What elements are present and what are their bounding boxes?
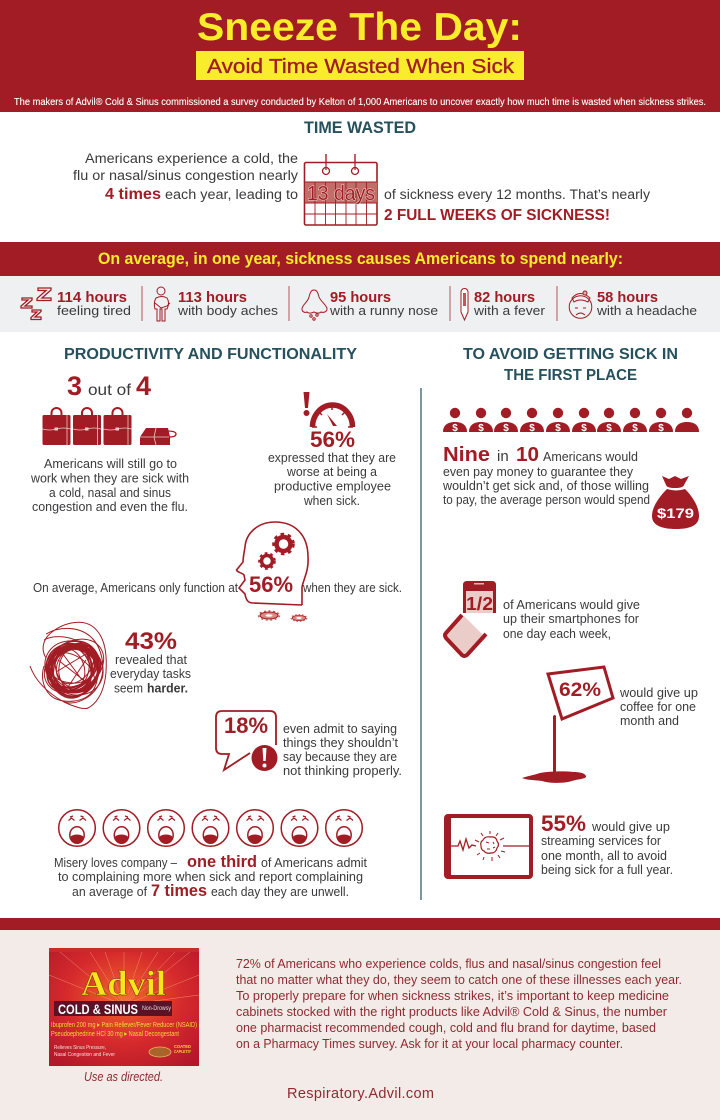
icon: tangled scribble — [30, 622, 114, 709]
stat: body aches: 113 hours — [178, 290, 247, 306]
subtitle banner: Avoid Time Wasted When Sick — [207, 56, 515, 78]
text block: colds per year — [73, 151, 299, 203]
text block: two full weeks: of sickness every 12 months. That’s nearly — [384, 187, 651, 203]
icons: row of ten people — [443, 408, 699, 434]
icon: runny nose — [302, 290, 327, 320]
text block: misery loves company: one third — [187, 852, 257, 871]
banner: on average — [0, 242, 720, 276]
subtitle banner — [196, 51, 524, 80]
product box: Advil Cold and Sinus — [49, 948, 199, 1066]
stat: headache: 58 hours — [597, 290, 658, 306]
stat: feeling tired: 114 hours — [57, 290, 127, 306]
heading: time wasted: TIME WASTED — [304, 119, 416, 137]
text block: things they shouldn't say: not thinking properly. — [283, 763, 402, 778]
footer body text: To properly prepare for when sickness strikes, it’s important to keep medicine — [236, 988, 669, 1003]
icon: money bag $179: $179 — [657, 506, 694, 521]
text block: things they shouldn't say: things they shouldn’t — [283, 735, 398, 750]
stat: 43% harder tasks — [110, 628, 191, 696]
text block: smartphones: up their smartphones for — [503, 611, 640, 626]
text block: coffee: would give up — [619, 685, 698, 700]
icon: head with gears — [236, 522, 308, 621]
stat: 56% worse employee: worse at being a — [286, 464, 378, 479]
icon: head with gears: 56% — [249, 572, 293, 597]
icon: half smartphone: 1/2 — [466, 594, 493, 614]
stat: 43% harder tasks: revealed that — [115, 652, 187, 667]
text block: streaming services: being sick for a full year. — [541, 862, 673, 877]
text block: nine in 10: Americans would — [543, 449, 638, 464]
text block: misery loves company: each day they are unwell. — [211, 884, 349, 899]
stat: body aches — [177, 290, 279, 318]
column divider — [420, 388, 422, 900]
text block: streaming services: streaming services for — [541, 833, 662, 848]
stat: headache — [596, 290, 697, 318]
stat: runny nose — [329, 290, 438, 318]
product box: Advil Cold and Sinus: Relieves Sinus Pressure, — [54, 1045, 106, 1051]
icon: calendar 13 days: 13 days — [307, 183, 375, 205]
stat: 43% harder tasks: harder. — [147, 680, 188, 696]
text block: smartphones: of Americans would give — [503, 597, 640, 612]
stat: fever: 82 hours — [474, 290, 535, 306]
product box: Advil Cold and Sinus: COATED — [174, 1044, 192, 1049]
text block: nine in 10: 10 — [516, 444, 539, 466]
stat: 56% worse employee: when sick. — [303, 493, 360, 508]
text block: coffee: month and — [620, 713, 679, 728]
text block: streaming services: one month, all to avoid — [541, 848, 667, 863]
text block: coffee — [619, 685, 698, 728]
stat: runny nose: with a runny nose — [329, 303, 438, 318]
text block: nine in 10: Nine — [443, 444, 490, 466]
icons: row of ten people: $ — [478, 423, 484, 434]
text block: streaming services: would give up — [591, 819, 670, 834]
icons: row of ten people: $ — [529, 423, 535, 434]
icons: row of ten people: $ — [632, 423, 638, 434]
icon: thermometer — [461, 288, 468, 320]
text block: colds per year: flu or nasal/sinus congestion nearly — [73, 168, 299, 184]
icon: speed gauge with exclamation — [304, 392, 353, 427]
icon: headache face — [569, 291, 592, 318]
text block: nine in 10: even pay money to guarantee they — [443, 464, 634, 479]
text block: nine in 10 — [442, 444, 650, 507]
icon: spilled coffee cup: 62% — [559, 679, 601, 701]
text block: streaming services — [541, 811, 673, 877]
text block: nine in 10: to pay, the average person would spend — [443, 492, 650, 507]
icons: row of ten people: $ — [606, 423, 612, 434]
icon: person with body aches — [154, 287, 170, 321]
product box: Advil Cold and Sinus: Nasal Congestion and Fever — [54, 1052, 115, 1058]
text block: smartphones — [503, 597, 640, 641]
stat: 43% harder tasks: 43% — [125, 628, 177, 655]
stat: feeling tired — [57, 290, 131, 318]
icon: speech bubble with 18%: 18% — [224, 713, 268, 738]
website link: Respiratory.Advil.com — [287, 1086, 434, 1102]
stat: 3 out of 4: out of — [88, 382, 132, 399]
text block: colds per year: Americans experience a cold, the — [85, 151, 298, 167]
icon: money bag $179 — [652, 476, 699, 529]
footer body text — [236, 956, 682, 1051]
icon: speech bubble with 18% — [216, 711, 278, 771]
text block: streaming services: 55% — [541, 811, 586, 836]
text block: misery loves company: 7 times — [151, 881, 207, 900]
text: when sick: when they are sick. — [302, 580, 402, 595]
header panel — [0, 0, 720, 112]
text block: misery loves company — [54, 852, 367, 900]
text block: nine in 10: wouldn’t get sick and, of those willing — [442, 478, 649, 493]
stat: 43% harder tasks: seem — [114, 680, 143, 696]
text block: go to work sick: work when they are sick with — [30, 470, 189, 486]
stat: runny nose: 95 hours — [330, 290, 391, 306]
stat: feeling tired: feeling tired — [57, 303, 131, 318]
icons: row of ten people: $ — [581, 423, 587, 434]
stat: fever — [473, 290, 546, 318]
stat: 3 out of 4 — [67, 371, 151, 401]
text block: misery loves company: Misery loves company – — [54, 855, 178, 870]
product box: Advil Cold and Sinus: COLD & SINUS — [58, 1001, 138, 1017]
icon: tv with virus — [446, 816, 531, 877]
stat: 56% worse employee: productive employee — [274, 478, 391, 494]
panel: symptom hours — [0, 276, 720, 332]
stat: 3 out of 4: 3 — [67, 371, 82, 401]
icon: calendar 13 days — [304, 154, 377, 225]
text block: go to work sick: a cold, nasal and sinus — [49, 485, 171, 500]
icons: row of ten people: $ — [555, 423, 561, 434]
heading: to avoid getting sick — [463, 346, 678, 384]
text block: misery loves company: to complaining more when sick and report complaining — [58, 869, 363, 884]
stat: 56% worse employee: 56% — [310, 427, 355, 452]
caption: use as directed: Use as directed. — [84, 1070, 163, 1084]
stat: 56% worse employee: expressed that they are — [268, 450, 396, 465]
title: Sneeze The Day: — [197, 6, 522, 49]
text block: go to work sick: congestion and even the flu. — [32, 499, 188, 514]
text block: things they shouldn't say: say because they are — [283, 749, 397, 764]
footer body text: one pharmacist recommended cough, cold and flu brand for daytime, based — [236, 1020, 656, 1035]
product box: Advil Cold and Sinus: Ibuprofen 200 mg ▸ Pain Reliever/Fever Reducer (NSAID) — [51, 1020, 197, 1029]
stat: 3 out of 4: 4 — [136, 371, 151, 401]
heading: to avoid getting sick: THE FIRST PLACE — [504, 367, 637, 384]
icons: row of ten people: $ — [658, 423, 664, 434]
text block: nine in 10: in — [497, 448, 509, 465]
text block: two full weeks — [384, 187, 651, 224]
text block: things they shouldn't say: even admit to saying — [283, 721, 397, 736]
banner: on average: On average, in one year, sickness causes Americans to spend nearly: — [98, 250, 623, 268]
stat: body aches: with body aches — [177, 303, 279, 318]
footer body text: on a Pharmacy Times survey. Ask for it at your local pharmacy counter. — [236, 1036, 623, 1051]
text block: colds per year: 4 times — [105, 186, 161, 203]
text block: go to work sick — [30, 456, 189, 514]
stat: fever: with a fever — [473, 303, 546, 318]
icon: spilled coffee cup — [522, 667, 613, 783]
icons: row of ten people: $ — [452, 423, 458, 434]
footer panel — [0, 918, 720, 1120]
text block: coffee: coffee for one — [620, 699, 696, 714]
icon: briefcases — [42, 408, 176, 445]
heading: to avoid getting sick: TO AVOID GETTING SICK IN — [463, 346, 678, 363]
text block: smartphones: one day each week, — [503, 626, 611, 641]
text block: two full weeks: 2 FULL WEEKS OF SICKNESS! — [384, 207, 610, 224]
text block: misery loves company: an average of — [72, 884, 147, 899]
product box: Advil Cold and Sinus: Non-Drowsy — [142, 1006, 171, 1012]
footer body text: cabinets stocked with the right products like Advil® Cold & Sinus, the number — [236, 1004, 668, 1019]
product box: Advil Cold and Sinus: CAPLETS* — [174, 1049, 191, 1054]
icon: half smartphone — [444, 581, 496, 658]
icon: sleep Zs — [21, 288, 51, 320]
heading: productivity and functionality: PRODUCTIVITY AND FUNCTIONALITY — [64, 346, 358, 363]
text: function at: On average, Americans only function at — [33, 580, 238, 595]
footer body text: 72% of Americans who experience colds, flus and nasal/sinus congestion feel — [236, 956, 661, 971]
text block: go to work sick: Americans will still go to — [44, 456, 177, 471]
product box: Advil Cold and Sinus: Pseudoephedrine HCl 30 mg ▸ Nasal Decongestant — [51, 1029, 180, 1038]
stat: 43% harder tasks: everyday tasks — [110, 666, 191, 681]
stat: 56% worse employee — [268, 427, 396, 508]
stat: headache: with a headache — [596, 303, 697, 318]
icons: row of ten people: $ — [503, 423, 509, 434]
product box: Advil Cold and Sinus: Advil — [81, 964, 166, 1003]
text block: misery loves company: of Americans admit — [261, 855, 367, 870]
icons: seven moaning faces — [59, 810, 362, 846]
footer body text: that no matter what they do, they seem to catch one of these illnesses each year. — [236, 972, 682, 987]
text block: things they shouldn't say — [283, 721, 402, 778]
text block: colds per year: each year, leading to — [165, 187, 298, 203]
